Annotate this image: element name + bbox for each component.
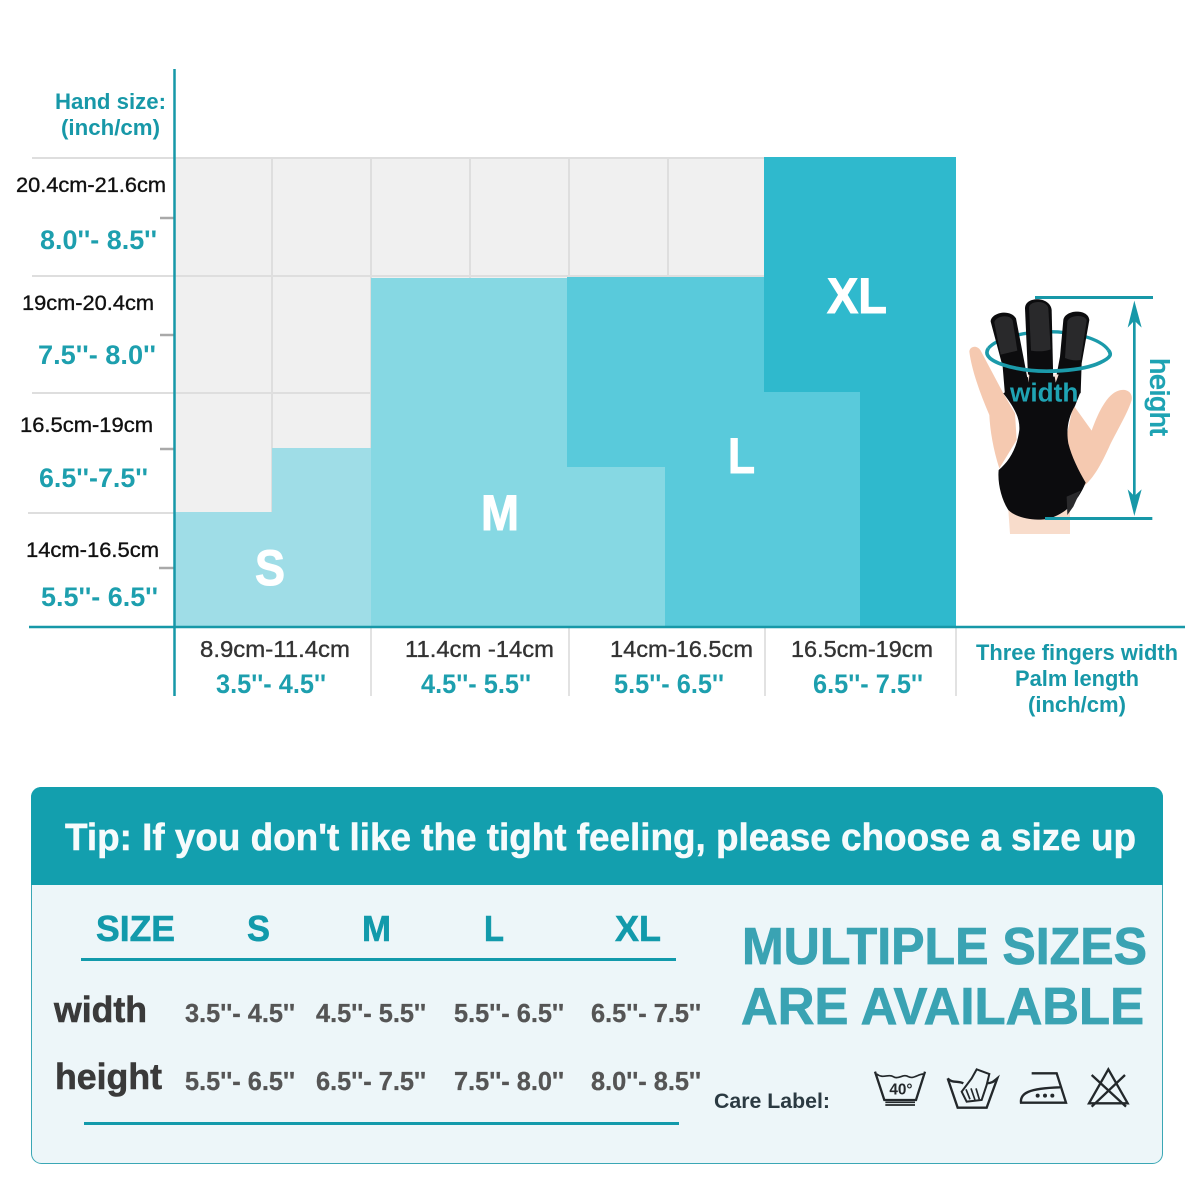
horizontal axis labels: 3.5''- 4.5'' (216, 669, 326, 699)
horizontal axis title: Three fingers width (976, 640, 1178, 665)
size block L (567, 277, 860, 626)
icon: hand wash (948, 1069, 997, 1108)
height row: 7.5''- 8.0'' (454, 1066, 564, 1096)
width row: 3.5''- 4.5'' (185, 998, 295, 1028)
width row: width (53, 989, 147, 1030)
size block XL: XL (827, 268, 887, 324)
vertical axis title: (inch/cm) (61, 115, 160, 140)
panel background (32, 788, 1162, 1164)
table header: M (362, 908, 391, 949)
chart background grid (28, 158, 956, 696)
horizontal axis labels: 14cm-16.5cm (610, 636, 753, 662)
vertical axis labels: 19cm-20.4cm (22, 292, 154, 315)
tip banner (31, 787, 1163, 885)
vertical axis labels: 5.5''- 6.5'' (41, 582, 158, 612)
width loop back (988, 332, 1108, 350)
vertical axis title: Hand size: (55, 89, 166, 114)
horizontal axis title (976, 640, 1178, 717)
horizontal axis title: (inch/cm) (1028, 692, 1126, 717)
horizontal axis labels: 6.5''- 7.5'' (813, 669, 923, 699)
vertical axis labels: 16.5cm-19cm (20, 414, 153, 437)
table header: SIZE (96, 908, 175, 949)
horizontal axis labels: 5.5''- 6.5'' (614, 669, 724, 699)
size block S (175, 448, 372, 626)
width row (53, 989, 701, 1030)
height label: height (1145, 358, 1175, 436)
icon: iron (1021, 1073, 1066, 1103)
width row: 5.5''- 6.5'' (454, 998, 564, 1028)
vertical axis labels: 14cm-16.5cm (26, 539, 159, 562)
width loop front (987, 348, 1110, 371)
vertical axis labels: 8.0''- 8.5'' (40, 225, 157, 255)
wrist strap (1067, 491, 1081, 515)
icon: wash 40 degrees: 40° (889, 1082, 913, 1099)
height measure lines and arrow (1035, 296, 1153, 520)
height row: 8.0''- 8.5'' (591, 1066, 701, 1096)
size chart (16, 69, 1185, 717)
tip banner: Tip: If you don't like the tight feeling, please choose a size up (65, 817, 1136, 859)
size table (53, 908, 701, 1125)
care label text: Care Label: (714, 1090, 830, 1113)
height row: 5.5''- 6.5'' (185, 1066, 295, 1096)
table header (96, 908, 661, 949)
horizontal axis labels: 11.4cm -14cm (405, 636, 554, 662)
multiple sizes heading: ARE AVAILABLE (741, 978, 1144, 1036)
width label: width (1009, 377, 1078, 407)
icon: do not bleach (1089, 1069, 1128, 1107)
size block XL (764, 157, 956, 626)
vertical axis labels: 20.4cm-21.6cm (16, 174, 166, 197)
care icons (875, 1069, 1128, 1108)
horizontal axis labels: 4.5''- 5.5'' (421, 669, 531, 699)
leather finger tips (994, 302, 1087, 360)
vertical axis labels: 7.5''- 8.0'' (38, 340, 156, 370)
height row: height (55, 1056, 162, 1097)
vertical axis labels (16, 174, 166, 612)
finger gaps (1028, 374, 1059, 383)
multiple sizes heading: MULTIPLE SIZES (742, 918, 1147, 976)
width row: 4.5''- 5.5'' (316, 998, 426, 1028)
hand with glove measurement diagram (969, 296, 1175, 534)
chart axes (29, 69, 1185, 696)
size block S: S (255, 540, 285, 596)
panel: size table and tip (31, 787, 1163, 1164)
table header: S (247, 908, 270, 949)
size block M (371, 278, 665, 626)
horizontal axis title: Palm length (1015, 666, 1139, 691)
size block M: M (481, 485, 519, 541)
icon: hand (969, 347, 1132, 534)
icon: black glove (991, 299, 1089, 520)
width row: 6.5''- 7.5'' (591, 998, 701, 1028)
icon: wash 40 degrees (875, 1072, 925, 1105)
table header: L (484, 908, 504, 949)
table header: XL (615, 908, 661, 949)
horizontal axis labels (200, 636, 933, 699)
height row (55, 1056, 701, 1097)
horizontal axis labels: 16.5cm-19cm (791, 636, 933, 662)
multiple sizes heading (741, 918, 1147, 1036)
horizontal axis labels: 8.9cm-11.4cm (200, 636, 350, 662)
size block L: L (728, 428, 755, 484)
vertical axis labels: 6.5''-7.5'' (39, 463, 148, 493)
height row: 6.5''- 7.5'' (316, 1066, 426, 1096)
vertical axis title (55, 89, 166, 140)
